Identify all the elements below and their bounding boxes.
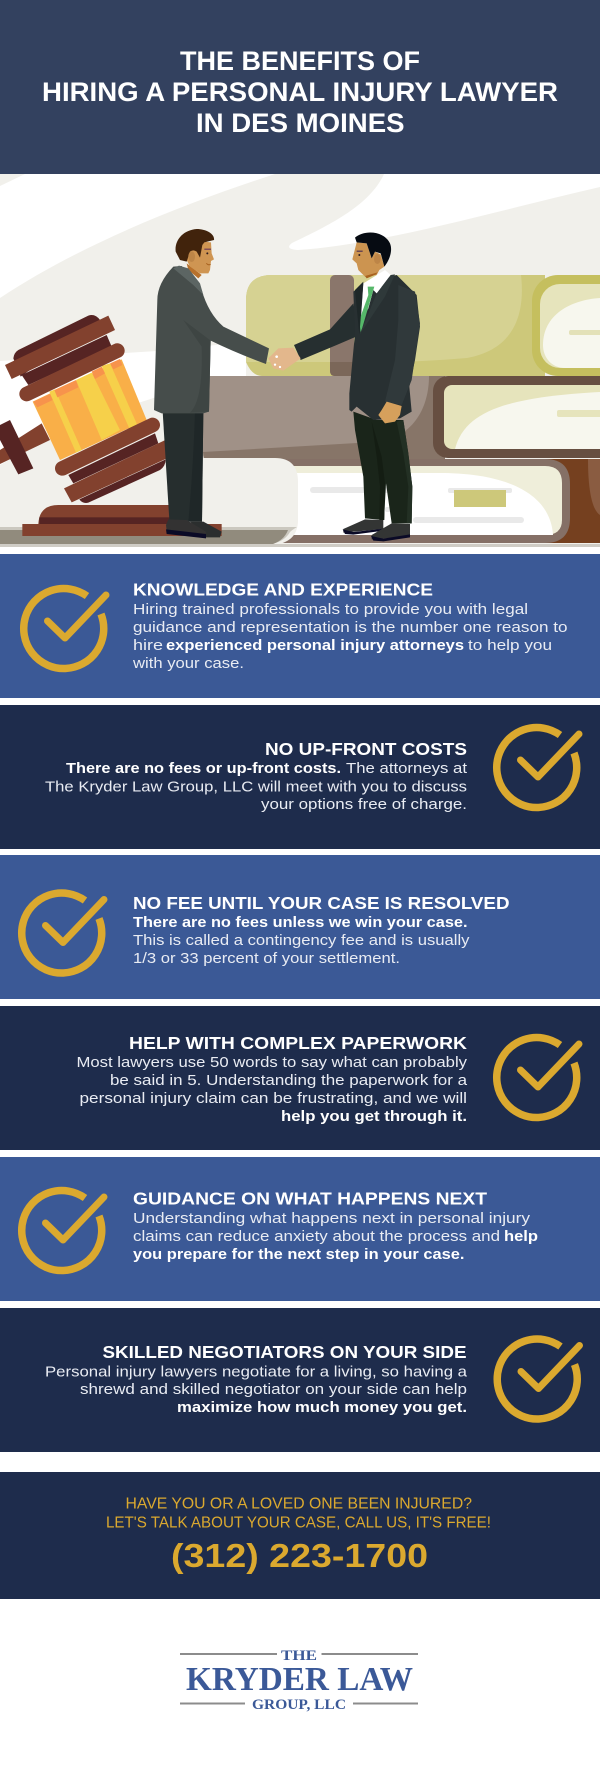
- panel: guidance on what happens next: [0, 1157, 600, 1301]
- icon: check circle: [24, 589, 106, 669]
- heading: GUIDANCE ON WHAT HAPPENS NEXT: [133, 1188, 487, 1208]
- hand at side: [378, 402, 402, 423]
- body text: This is called a contingency fee and is usually: [133, 932, 470, 949]
- body text: experienced personal injury attorneys: [166, 637, 464, 654]
- jacket: [294, 275, 420, 420]
- icon: gavel: [0, 315, 222, 536]
- body text: There are no fees unless we win your case.: [133, 914, 468, 931]
- lower law book: [203, 458, 600, 545]
- logo: The Kryder Law Group, LLC: GROUP, LLC: [252, 1697, 346, 1713]
- call to action panel: [0, 1472, 600, 1599]
- upper law book: [246, 275, 600, 376]
- phone number: (312) 223-1700: [171, 1537, 428, 1574]
- logo: The Kryder Law Group, LLC: [180, 1648, 418, 1713]
- body text: help: [504, 1228, 538, 1245]
- body text: The Kryder Law Group, LLC will meet with you to discuss: [45, 778, 467, 796]
- panel: help with complex paperwork: [0, 1006, 600, 1150]
- handshake: [268, 348, 301, 371]
- body text: [76, 1054, 468, 1125]
- body text: [133, 914, 470, 967]
- call to action text: HAVE YOU OR A LOVED ONE BEEN INJURED?: [126, 1496, 472, 1512]
- heading: HELP WITH COMPLEX PAPERWORK: [129, 1033, 467, 1053]
- body text: The attorneys at: [346, 760, 468, 777]
- icon: check circle: [497, 1038, 579, 1118]
- body text: maximize how much money you get.: [177, 1399, 467, 1416]
- head, collar and tie: [352, 232, 395, 335]
- call to action text: [106, 1496, 491, 1532]
- call to action text: LET'S TALK ABOUT YOUR CASE, CALL US, IT'S FREE!: [106, 1514, 491, 1532]
- body text: help you get through it.: [281, 1108, 467, 1125]
- logo: The Kryder Law Group, LLC: KRYDER LAW: [186, 1661, 413, 1698]
- logo: The Kryder Law Group, LLC: THE: [281, 1648, 317, 1664]
- body text: Most lawyers use 50 words to say what can probably: [76, 1054, 468, 1071]
- body text: your options free of charge.: [261, 796, 467, 813]
- icon: check circle: [497, 728, 579, 808]
- title: THE BENEFITS OF: [180, 46, 420, 76]
- body text: Hiring trained professionals to provide you with legal: [133, 601, 528, 618]
- body text: with your case.: [132, 655, 244, 672]
- ground: [0, 527, 600, 547]
- panel: no fee until your case is resolved: [0, 855, 600, 999]
- body text: be said in 5. Understanding the paperwork for a: [110, 1072, 468, 1089]
- icon: check circle: [22, 1191, 104, 1271]
- body text: shrewd and skilled negotiator on your side can help: [80, 1381, 467, 1398]
- body text: guidance and representation is the number one reason to: [133, 619, 568, 636]
- body text: to help you: [468, 637, 552, 654]
- body text: 1/3 or 33 percent of your settlement.: [133, 950, 400, 967]
- heading: KNOWLEDGE AND EXPERIENCE: [133, 580, 433, 600]
- icon: check circle: [22, 893, 104, 973]
- body text: hire: [133, 637, 163, 654]
- man in grey suit: [154, 229, 269, 538]
- body text: There are no fees or up-front costs.: [66, 760, 341, 777]
- heading: SKILLED NEGOTIATORS ON YOUR SIDE: [102, 1342, 466, 1362]
- body text: Understanding what happens next in personal injury: [133, 1210, 531, 1227]
- body text: Personal injury lawyers negotiate for a living, so having a: [45, 1364, 468, 1380]
- icon: check circle: [497, 1339, 580, 1419]
- body text: [45, 1364, 468, 1416]
- body text: claims can reduce anxiety about the process and: [133, 1228, 500, 1245]
- body text: [133, 1210, 538, 1263]
- body text: you prepare for the next step in your case.: [133, 1246, 464, 1263]
- illustration: handshake, gavel and law books: [0, 174, 600, 547]
- header panel: [0, 0, 600, 174]
- man in dark suit: [294, 232, 420, 541]
- middle law book: [203, 376, 600, 466]
- panel: knowledge and experience: [0, 554, 600, 698]
- body text: personal injury claim can be frustrating, and we will: [80, 1090, 467, 1107]
- body text: [132, 601, 568, 672]
- heading: NO UP-FRONT COSTS: [265, 739, 467, 759]
- heading: NO FEE UNTIL YOUR CASE IS RESOLVED: [133, 893, 510, 913]
- title: HIRING A PERSONAL INJURY LAWYER: [42, 77, 558, 107]
- trousers and shoes: [343, 412, 412, 541]
- title: [42, 46, 558, 138]
- panel: skilled negotiators on your side: [0, 1308, 600, 1452]
- title: IN DES MOINES: [196, 108, 404, 138]
- panel: no up-front costs: [0, 705, 600, 849]
- body text: [45, 760, 468, 813]
